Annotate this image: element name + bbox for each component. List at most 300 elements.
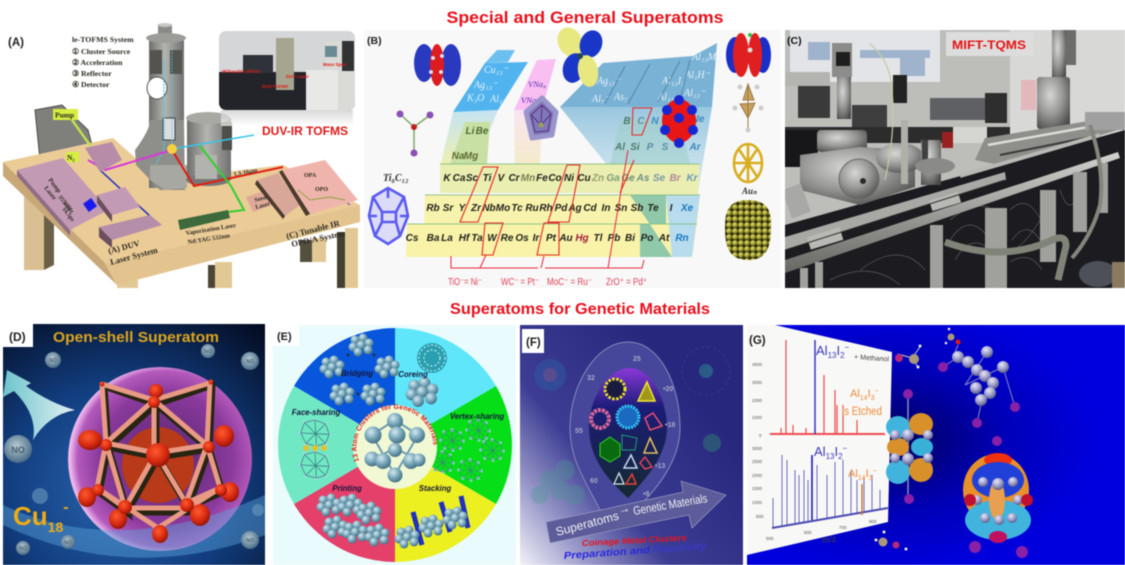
periodic table element symbols: Cs [406,233,419,244]
sector vertex-sharing [395,386,512,504]
Cu18- formula: Cu [13,501,48,531]
periodic table element symbols: Xe [680,203,694,214]
source chamber [186,112,232,186]
Cu18- formula: - [63,499,69,516]
panel F: coinage metal clusters [520,325,743,565]
arrow text: Genetic Materials [632,491,708,518]
panel label B: (B) [367,35,382,47]
NO molecules: NO [204,349,212,355]
periodic table element symbols: Po [641,233,653,244]
periodic table element symbols: Kr [686,173,699,184]
OPO box [279,160,358,216]
sector labels: Printing [332,484,362,493]
spectrum labels: 13 [828,351,837,360]
red highlight boxes [460,108,652,255]
spectrum labels: 2 [840,351,845,360]
methanol top [895,344,922,368]
inset photo: DUV Laser [286,74,309,79]
blue spectrum [772,455,888,528]
periodic table element symbols: Ti [483,173,492,184]
beam paths [72,50,350,228]
tunable IR label [285,218,346,249]
periodic table element symbols: Br [669,173,682,184]
right blue slab: Al₁₃ [657,92,674,103]
vacuum hose [945,238,1066,280]
bridging clusters [320,334,400,406]
periodic table element symbols: La [441,233,453,244]
periodic table element symbols: Na [452,151,465,162]
methanol upper right [945,328,960,344]
spectrum labels: Al [850,388,860,400]
title: special and general superatoms: Special and General Superatoms [446,9,724,27]
periodic table element symbols: I [670,203,673,214]
periodic table element symbols: Fe [536,173,548,184]
panel E background [273,325,516,565]
teardrop ring [570,342,680,510]
pink slab: VNa₇⁻ [521,95,545,105]
arrow [546,481,726,543]
inset photo [219,31,355,110]
panel C: MIFT-TQMS photo [782,30,1125,288]
Y shaped molecule [396,110,434,156]
orbital top right [726,33,771,77]
spectrum labels: 14 [860,395,868,402]
pink slab: VNa₈ [528,79,546,89]
axis ticks: 500 [766,536,774,541]
spectrum labels: − [873,468,877,475]
vertical supports [800,163,1108,288]
red equation arrows [451,150,644,268]
spectrum labels: 3 [871,395,875,402]
axis ticks: 2000 [752,398,763,403]
periodic table element symbols: In [602,203,610,214]
Au_n label: Auₙ [741,186,757,196]
spectrum labels: m/z [821,534,837,545]
sector labels [292,369,504,493]
periodic table element symbols: N [651,116,659,127]
axis ticks: 700 [839,525,847,530]
sector stacking [395,445,496,562]
NO molecules [4,344,264,555]
subtitle blue: Preparation and Reactivity [563,541,707,562]
size labels: 32 [587,375,595,382]
red spectrum [770,340,885,434]
spectrum labels: I [834,444,838,459]
sector labels: Vertex-sharing [450,412,504,421]
Cu18 core [122,427,194,503]
axis ticks: 1500 [752,486,763,491]
periodic table element symbols: Ta [471,233,483,244]
aluminium rails [785,135,1120,273]
inset photo: IR/Tunable OPO/A [222,69,261,74]
label D: (D) [9,330,26,344]
heading: Open-shell Superatom [53,330,219,346]
right blue slab [560,43,721,107]
periodic table element symbols: S [662,142,669,153]
periodic table element symbols: B [623,116,631,127]
spectrum labels: − [843,444,848,453]
sector labels: Stacking [419,484,451,493]
periodic table element symbols: Hg [575,233,589,244]
central circle [353,405,437,489]
table legs [24,190,358,288]
system legend: ③ Reflector [72,69,112,78]
axis ticks: 3000 [752,446,763,451]
instrument name: DUV-IR TOFMS [262,126,348,138]
right blue slab: Al₁₃⁻ [683,88,706,99]
pump label: Pump [55,110,74,120]
periodic table element symbols: C [637,116,645,127]
dark frame interior [785,130,1125,288]
periodic table element symbols: Ne [692,114,705,125]
panel D: open-shell superatom [3,324,265,565]
periodic table element symbols: Bi [625,233,635,244]
vaporization laser [178,210,237,246]
periodic table element symbols: Au [558,233,573,244]
optics blocks [83,142,162,248]
periodic table element symbols: Ge [621,173,635,184]
spectrum sheet [747,325,892,555]
periodic table element symbols: At [658,233,670,244]
spectrum labels: I [868,388,871,400]
axis ticks: 1000 [752,415,763,420]
N2 label: N₂ [67,153,75,162]
NO molecules: NO [246,538,254,544]
panel G: mass spectra [747,325,1125,565]
OPO box: OPA [304,173,317,179]
periodic table element symbols: Se [653,173,666,184]
NO molecules: NO [49,358,57,364]
vertex-sharing clusters [429,418,505,482]
panel F background [520,325,743,565]
axis ticks: 2500 [752,459,763,464]
periodic table element symbols: Ag [567,203,582,214]
system legend: ④ Detector [72,80,110,89]
Cu18 atoms [78,380,239,543]
right blue slab: As₇ [613,92,628,103]
seed laser box [246,190,275,212]
panel C: MIFT-TQMS photo: MIFT-TQMS [952,38,1026,52]
cluster thumbnails [591,379,662,484]
system legend: le-TOFMS System [72,35,134,44]
axis ticks: 2000 [752,473,763,478]
methanol bottom [874,530,908,550]
beam focus point [167,144,177,154]
sector coreing [395,328,496,445]
NO molecules: NO [11,445,25,455]
Cu18 bonds shadow [99,385,222,512]
pump laser box: 10Hz [61,201,75,215]
periodic table element symbols: Al [614,142,625,153]
periodic table element symbols: Re [501,233,514,244]
purple planet [68,367,252,551]
periodic table element symbols: Nb [482,203,496,214]
curved title: 13 Atom Clusters for Genetic Materials [351,403,438,462]
size labels: •8 [643,491,649,498]
label E: (E) [277,331,292,343]
left blue slab [453,50,528,112]
periodic table element symbols: Rn [675,233,689,244]
pump laser box: 16.5ps [60,207,76,223]
superatom equations: MoC⁻ = Ru⁻ [547,277,592,288]
sector printing [294,445,395,562]
periodic table element symbols: Mo [496,203,510,214]
periodic table element symbols: Rh [539,203,553,214]
size labels: •20 [663,386,673,393]
periodic table element symbols: Tl [594,233,603,244]
periodic table element symbols: Cu [577,173,591,184]
panel label A: (A) [8,37,24,49]
DUV system label: (A) DUV [107,238,142,256]
left blue slab: Cu₁₃⁻ [484,65,509,76]
NO molecules: NO [19,546,27,552]
spectrum labels: Al [814,444,826,459]
Cu18 bonds [97,383,220,528]
arrow text: → [617,501,631,517]
left blue slab: Al₁₃ [489,94,506,105]
periodic table element symbols: Sn [615,203,627,214]
transparent projections [440,107,712,193]
periodic table element symbols: Pt [546,233,557,244]
label E [273,325,299,346]
gold cage [734,144,762,182]
NO molecules: NO [246,359,254,365]
periodic table element symbols: Ir [533,233,540,244]
spectrum labels: Al [848,468,858,480]
spectrum labels: 14 [858,475,866,482]
pump laser box [17,158,108,236]
spectrum labels: Al [816,343,828,358]
system legend: ① Cluster Source [72,47,131,56]
spectrum labels: is Etched [842,406,882,418]
orbital cluster lower right [963,436,1033,558]
periodic table element symbols: Cr [508,173,521,184]
label F [522,329,544,353]
pump laser box: 355nm [56,195,72,212]
axis ticks: 4500 [752,362,763,367]
periodic table element symbols: Ba [427,233,440,244]
vaporization laser: Vaporization Laser [185,222,237,237]
spectrum labels: I [866,468,869,480]
left blue slab: Ag₁₃⁻ [473,80,498,91]
table top [3,138,360,263]
NO molecules: NO [64,540,72,546]
superatom equations: WC⁻ = Pt⁻ [501,277,539,288]
periodic table element symbols: Ar [688,142,702,153]
axis ticks: 800 [869,519,877,524]
teardrop window [589,368,667,498]
face-sharing clusters [299,418,331,480]
periodic table element symbols: Zn [591,173,604,184]
periodic table element symbols: Te [647,203,659,214]
seed laser box: Laser [255,201,271,211]
periodic table element symbols: Os [515,233,529,244]
periodic table element symbols: Tc [511,203,523,214]
wall and room [784,30,1125,226]
periodic table background [406,120,700,257]
DUV system label: Laser System [109,245,159,267]
pink slab [514,59,556,110]
periodic table element symbols: W [487,233,498,244]
axis ticks [752,362,877,541]
table front edges [3,162,117,285]
system legend [72,35,134,89]
periodic table element symbols: Mg [464,151,478,162]
periodic table element symbols: Zr [470,203,482,214]
spectrum labels: − [845,343,850,352]
gold hydride cluster [732,84,764,132]
spectrum labels: 2 [838,452,843,461]
periodic table element symbols: Pd [555,203,568,214]
periodic table element symbols: Cd [583,203,598,214]
inset photo: Mass Spec [323,62,347,67]
orange peak [861,484,863,515]
sector bridging [294,328,395,445]
label D [3,324,33,347]
periodic table element symbols: Y [459,203,467,214]
label C: (C) [787,35,802,47]
periodic table element symbols: Li [466,126,475,137]
arrow text [554,491,708,539]
wiring [830,190,1080,285]
periodic table element symbols: Pb [608,233,620,244]
printing clusters [316,494,390,546]
periodic table element symbols: Co [548,173,562,184]
periodic table element symbols: Ga [606,173,620,184]
swoosh wave [3,495,265,558]
axis ticks: 1000 [752,500,763,505]
periodic table element symbols: As [636,173,650,184]
NO arrow [3,370,75,440]
sector face-sharing [278,386,395,504]
cosmic background [3,324,265,565]
pentagon cluster [526,98,556,138]
vaporization laser: Nd:YAG 532nm [187,232,231,246]
size labels: •13 [655,463,665,470]
Cu18- formula: 18 [48,519,63,535]
central 13 atom cluster [364,413,426,482]
sector labels: Coreing [398,370,428,379]
spectrum labels [814,343,890,545]
panel A: DUV-IR TOFMS instrument [3,23,360,288]
spectrum labels: 13 [826,452,835,461]
axis ticks: 500 [756,514,764,519]
faint background clusters [531,347,730,505]
section heading: superatoms for genetic materials: Superatoms for Genetic Materials [450,301,710,318]
periodic table element symbols: Sc [466,173,479,184]
spectrum labels: 3 [869,475,873,482]
axis ticks: 600 [804,530,812,535]
size labels: 60 [590,478,598,485]
pump laser box: Pump [46,177,62,195]
tunable IR label: (C) Tunable IR [285,218,341,241]
superatom equations: TiO⁻= Ni⁻ [448,277,482,288]
ball cluster upper right [938,345,1020,428]
pump housing [35,105,92,160]
right blue slab: Al₁₃Mg [691,52,721,63]
inset reflection [221,110,353,126]
label F: (F) [526,337,541,349]
right blue slab: Al₇⁻ [591,94,610,105]
Ti8C12 cage [369,188,408,244]
pump laser IR box [255,173,300,219]
pump [1079,261,1117,287]
panel B: superatom periodic table [364,23,781,288]
axis ticks: 3000 [752,380,763,385]
spectrum labels: − [875,388,879,395]
periodic table element symbols: Mn [521,173,535,184]
orbital cluster left [886,389,933,504]
orbital top left [414,44,461,86]
size labels: 25 [633,356,641,363]
periodic table element symbols: Rb [426,203,440,214]
right blue slab: Al₁₃I₂ [661,76,685,87]
size labels: 55 [575,428,583,435]
size labels: •18 [665,422,675,429]
Ti8C12 label: Ti₈C₁₂ [383,173,409,184]
chambers [782,30,1125,218]
left blue slab: K₃O [466,93,484,104]
superatom equations: ZrO⁺ = Pd⁺ [606,277,647,288]
seed laser box: Seed [254,195,268,204]
panel E: 13-atom clusters wheel [273,325,516,565]
periodic table element symbols: Ni [564,173,574,184]
Au nanoparticle [725,200,771,260]
name tag [946,32,1011,56]
right blue slab: Ag₁₃⁻ [596,76,621,87]
arrow text: Superatoms [554,509,620,539]
axis ticks: 0 [759,433,762,438]
panel B background [364,30,781,288]
label G: (G) [749,335,766,347]
periodic table element symbols: Ca [453,173,466,184]
pump laser box: Laser [42,185,58,202]
inset photo: DUV-TOFMS [262,84,288,89]
tunable IR label: OPO/A System [290,228,346,249]
sector labels: Bridging [341,369,373,378]
size labels [575,356,675,498]
right blue slab: Al₁H⁻ [684,70,711,81]
tower chamber [135,23,187,190]
periodic table element symbols: K [443,173,451,184]
periodic table element symbols: Sb [631,203,643,214]
spectrum labels: + Methanol [854,354,890,363]
orbital top centre [553,23,606,88]
superatom equations [448,277,647,288]
system legend: ② Acceleration [72,58,123,67]
OPO box: OPO [315,187,328,193]
periodic table element symbols: Sr [443,203,454,214]
periodic table element symbols: P [647,142,654,153]
etched blue peak [814,340,816,434]
periodic table element symbols: V [498,173,506,184]
red blue superatom [660,95,698,148]
stacking clusters and strands [394,496,468,548]
sector labels: Face-sharing [292,408,341,417]
N2 label [66,152,79,162]
subtitle red: Coinage Metal Clusters [582,533,687,548]
pump label [53,109,78,120]
periodic table element symbols [406,114,705,244]
periodic table element symbols: Ru [525,203,539,214]
periodic table element symbols: Be [476,126,489,137]
periodic table element symbols: Si [630,142,640,153]
coreing cluster [406,343,447,407]
wavelength label: 1.3-16μm [233,168,258,178]
periodic table element symbols: Hf [459,233,471,244]
blue background [747,325,1125,565]
spectrum labels: I [836,343,840,358]
